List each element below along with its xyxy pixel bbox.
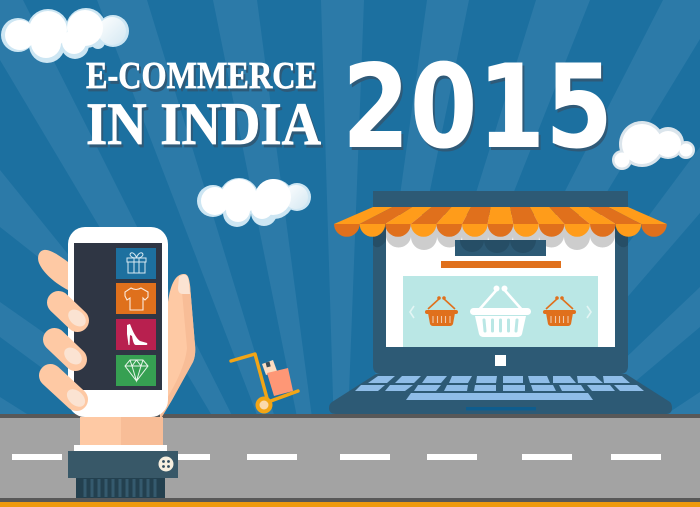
web page [373, 215, 628, 347]
basket: right small [543, 296, 576, 326]
hand holding phone [38, 227, 195, 498]
sleeve stripes [76, 478, 165, 498]
hand truck with boxes [231, 354, 298, 414]
title: year 2015: 2015 [344, 43, 615, 178]
fingernails [61, 275, 190, 410]
shirt cuff [74, 445, 167, 451]
striped awning [334, 207, 667, 237]
title: e-commerce in india: IN INDIA [88, 94, 323, 160]
sleeve cuff with button [68, 451, 178, 478]
title: year 2015: 2015 [342, 40, 613, 175]
home button [495, 355, 506, 366]
laptop base [329, 374, 672, 414]
tile: t-shirt [116, 283, 156, 314]
basket: left small [425, 296, 458, 326]
cloud: centre [197, 178, 311, 227]
title: e-commerce in india: E-COMMERCE [88, 58, 319, 100]
basket: centre large [470, 286, 531, 337]
wrist [80, 417, 163, 446]
tile: high heel [116, 319, 156, 350]
laptop storefront [329, 191, 672, 414]
title: e-commerce in india [86, 55, 323, 160]
laptop screen frame [373, 191, 628, 374]
cloud: top left [1, 8, 129, 63]
title: e-commerce in india: IN INDIA [86, 91, 321, 157]
tile: gift [116, 248, 156, 279]
fingers [38, 250, 78, 400]
title: e-commerce in india: E-COMMERCE [86, 55, 317, 97]
road [0, 414, 700, 507]
palm and thumb [160, 274, 195, 420]
cloud: right [612, 121, 695, 170]
tile: diamond [116, 355, 156, 386]
phone [68, 227, 168, 417]
